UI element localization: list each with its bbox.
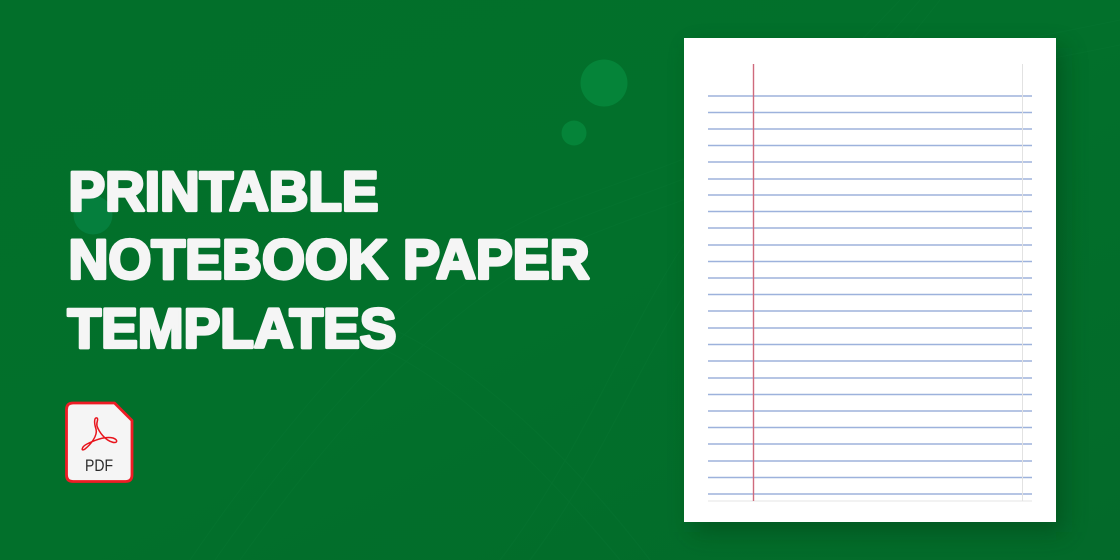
paper shadow	[692, 48, 1064, 532]
title: NOTEBOOK PAPER	[68, 228, 590, 290]
icon: Acrobat swirl	[82, 418, 117, 450]
decorative circle: behind title	[74, 196, 112, 234]
title: PRINTABLE	[68, 160, 378, 222]
right margin line	[1022, 64, 1024, 501]
title	[68, 160, 590, 359]
notebook paper	[684, 38, 1056, 522]
icon: PDF file	[66, 403, 132, 482]
title: TEMPLATES	[68, 297, 396, 359]
red margin line	[752, 64, 754, 501]
bottom faint line	[708, 500, 1032, 502]
ruled lines	[708, 96, 1032, 494]
decorative circle: small	[562, 120, 586, 146]
decorative circle: large	[580, 60, 628, 106]
icon label: PDF: PDF	[85, 457, 113, 475]
